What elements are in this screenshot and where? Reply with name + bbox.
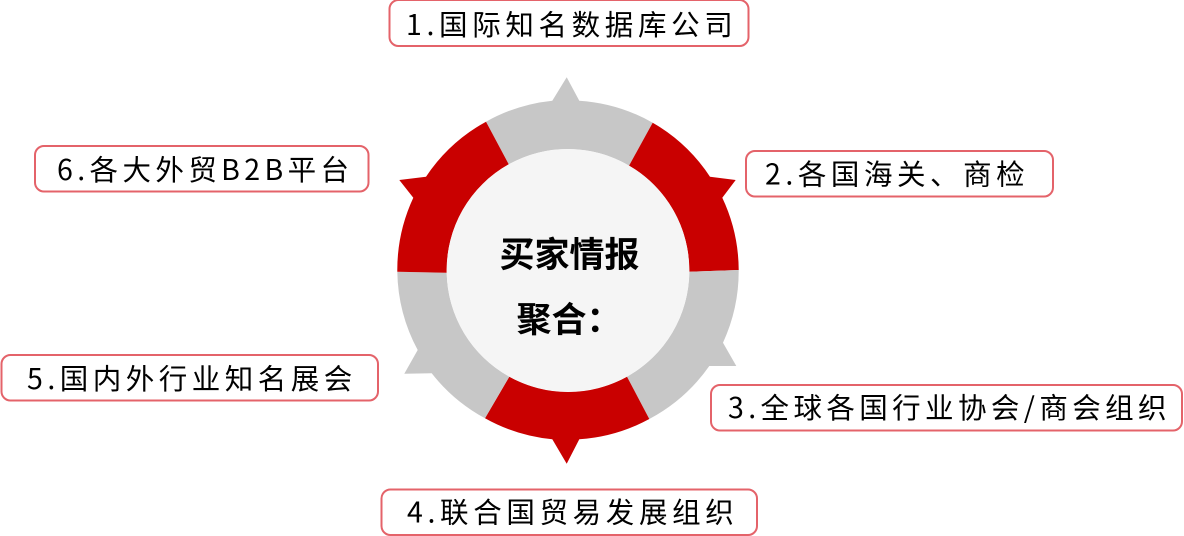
label 3: 3.全球各国行业协会/商会组织 — [728, 386, 1171, 427]
label 2: 2.各国海关、商检 — [765, 152, 1029, 194]
center title: 买家情报 — [500, 227, 640, 278]
center title: 聚合： — [516, 292, 622, 343]
label 5: 5.国内外行业知名展会 — [27, 357, 357, 398]
segment: lower left gray — [397, 272, 509, 418]
center circle — [447, 149, 689, 392]
segment: lower right gray — [627, 270, 739, 419]
segment: upper right red — [629, 123, 739, 272]
segment: bottom red — [485, 377, 649, 464]
segment: top gray — [486, 77, 653, 166]
label 6: 6.各大外贸B2B平台 — [57, 148, 353, 189]
label 1: 1.国际知名数据库公司 — [406, 3, 737, 44]
segment: upper left red — [397, 122, 509, 273]
label 4: 4.联合国贸易发展组织 — [407, 490, 738, 532]
ring diagram — [397, 77, 739, 464]
center title — [500, 227, 640, 343]
